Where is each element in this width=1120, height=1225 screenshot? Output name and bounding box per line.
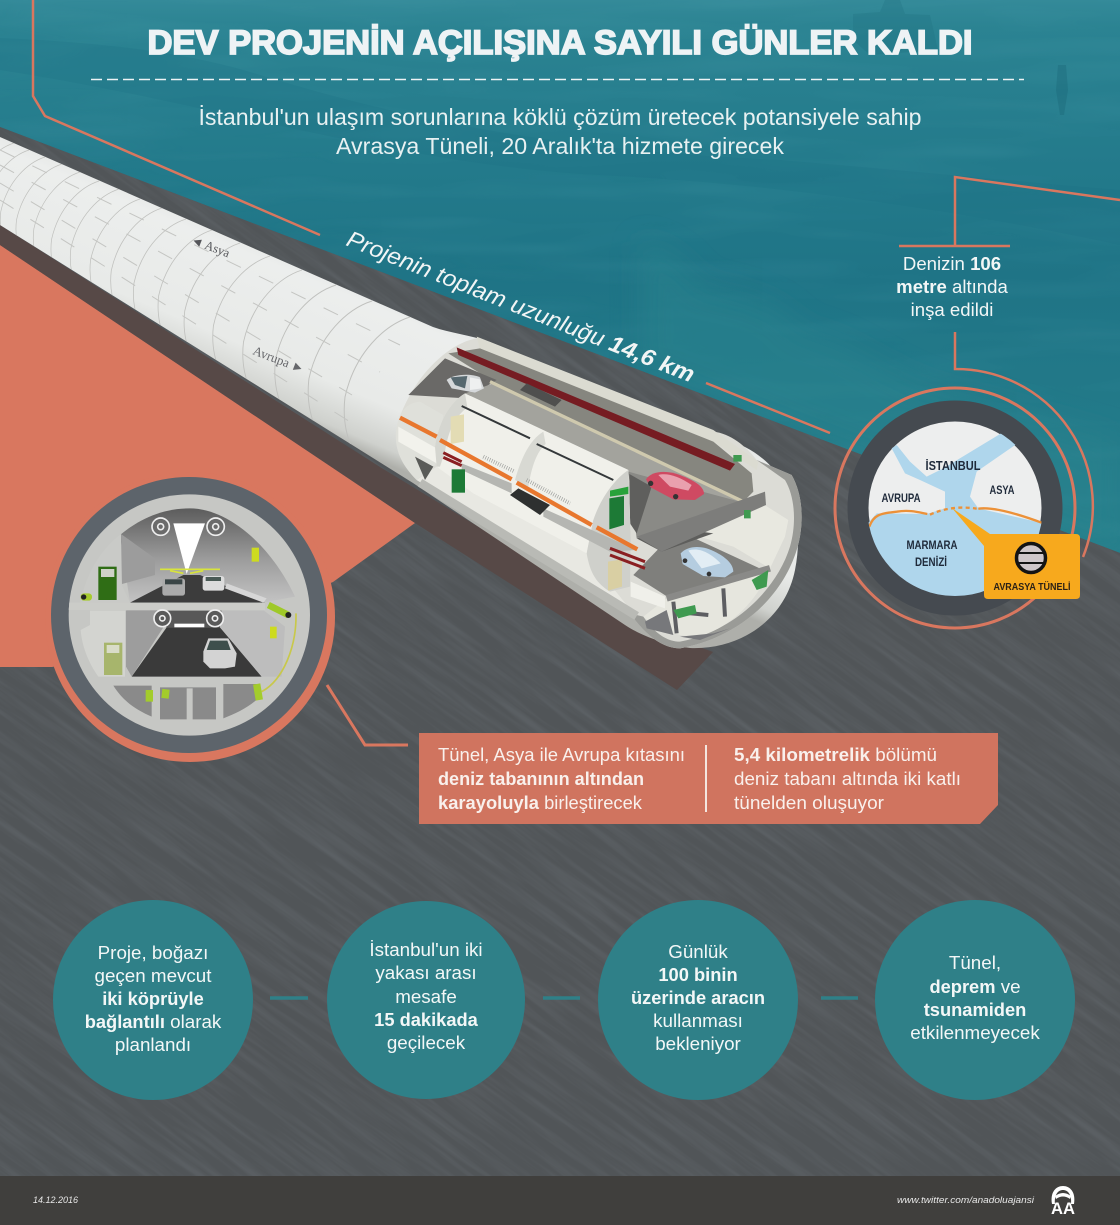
depth pointer line [899, 177, 1120, 557]
upper left compartment [120, 534, 121, 542]
lower right wall [677, 500, 788, 568]
subtitle [198, 104, 922, 159]
fans bottom [154, 610, 223, 627]
length line left [33, 0, 320, 235]
circle 3: üzerinde aracın [631, 987, 765, 1008]
title: DEV PROJENİN AÇILIŞINA SAYILI GÜNLER KALDI [148, 24, 972, 62]
circle 4: etkilenmeyecek [910, 1022, 1040, 1043]
length line right [706, 383, 830, 433]
circle 1: planlandı [115, 1034, 191, 1055]
concrete ledge [462, 463, 637, 552]
door top [98, 567, 117, 600]
lower road [633, 530, 763, 598]
pipe left [81, 593, 92, 601]
map labels: İSTANBUL [926, 458, 981, 473]
panel background [419, 733, 998, 824]
circle 3 [598, 900, 798, 1100]
map labels: ASYA [990, 485, 1014, 497]
lower road [132, 627, 262, 677]
map labels: AVRUPA [882, 493, 920, 505]
red rail [457, 347, 735, 471]
tunnel cross section [45, 472, 335, 762]
footer [0, 1176, 1120, 1225]
tunnel segment lines [0, 143, 410, 454]
depth text: Denizin 106 [903, 253, 1001, 274]
white block [398, 427, 437, 463]
end rim [630, 460, 802, 648]
map labels [882, 458, 1014, 569]
upper right wall [225, 583, 267, 603]
end disc [396, 338, 802, 648]
depth text: inşa edildi [911, 299, 993, 320]
circle 4: tsunamiden [924, 999, 1026, 1020]
lower right wall [220, 611, 285, 677]
basement [643, 568, 770, 637]
green cabinet left [452, 469, 465, 493]
lower left compartment [81, 611, 125, 677]
upper road [628, 472, 743, 538]
source url: www.twitter.com/anadoluajansi [897, 1195, 1035, 1206]
circle 2: geçilecek [387, 1032, 466, 1053]
white skylight [173, 523, 205, 574]
subtitle: İstanbul'un ulaşım sorunlarına köklü çözüm üretecek potansiyele sahip [198, 104, 922, 130]
label: Avrupa: Avrupa ► [251, 343, 307, 376]
panel: description [419, 733, 998, 824]
blue car [681, 547, 733, 577]
arch left [435, 393, 467, 467]
lower wall [417, 467, 633, 613]
panel: salmon background [0, 245, 415, 667]
bottom pipes [149, 684, 259, 702]
divider [705, 745, 707, 812]
map labels: MARMARA [906, 540, 958, 552]
text left: deniz tabanının altından [438, 768, 644, 789]
circle 2: İstanbul'un iki [369, 939, 483, 960]
orange band [400, 418, 637, 549]
cable [262, 613, 296, 692]
circle 1: iki köprüyle [102, 988, 204, 1009]
top car left [162, 578, 185, 596]
label: Asya: ◄ Asya [189, 233, 232, 260]
date: 14.12.2016 [33, 1195, 78, 1205]
red lower rails [443, 453, 645, 568]
circle 2: mesafe [395, 986, 457, 1007]
lower floor band [420, 483, 637, 616]
cable rails [462, 406, 613, 480]
map labels: DENİZİ [915, 556, 947, 569]
map water [868, 434, 1042, 596]
green cabinet right [609, 496, 624, 529]
depth text: metre altında [896, 276, 1008, 297]
text right [734, 744, 961, 813]
fans top [152, 518, 224, 535]
floor slab [68, 603, 265, 610]
silver car [447, 375, 484, 393]
soil strip under tunnel [0, 225, 713, 690]
dark notch [415, 457, 433, 480]
map outer ring [835, 388, 1075, 628]
section interior [68, 494, 310, 736]
title divider [91, 78, 1024, 80]
deck between partition and kerb [465, 383, 745, 537]
subtitle: Avrasya Tüneli, 20 Aralık'ta hizmete girecek [336, 133, 785, 159]
sea background [0, 0, 1120, 560]
left arch wall [396, 402, 443, 480]
lime box top right [252, 548, 259, 562]
connectors [270, 996, 858, 1000]
kerb [490, 382, 743, 502]
circle 4: Tünel, [949, 952, 1001, 973]
arch right [587, 470, 631, 592]
circle 2: yakası arası [375, 962, 477, 983]
green clamps [673, 455, 768, 618]
arch mid [515, 432, 546, 487]
circle 1: geçen mevcut [95, 965, 212, 986]
back ledge [477, 337, 758, 470]
text left: Tünel, Asya ile Avrupa kıtasını [438, 744, 685, 765]
circle 3: bekleniyor [655, 1033, 741, 1054]
bottom car [203, 638, 237, 668]
circle 2: 15 dakikada [374, 1009, 479, 1030]
red car [646, 472, 704, 500]
door [451, 414, 464, 444]
basement supports [673, 588, 725, 633]
section salmon ring [45, 472, 335, 762]
upper chamber [120, 508, 295, 603]
lower left wall [126, 611, 163, 677]
lower compartments [113, 684, 260, 719]
upper left wall [121, 534, 155, 584]
depth text [896, 253, 1008, 320]
text left [438, 744, 685, 813]
text right: 5,4 kilometrelik bölümü [734, 744, 937, 765]
circle 2 [327, 901, 525, 1099]
section pointer line [327, 685, 408, 745]
road shadow [629, 474, 652, 533]
upper deck floor [448, 348, 753, 502]
logo: AA: AA [1051, 1199, 1075, 1218]
length label: Projenin toplam uzunluğu 14,6 km [343, 225, 698, 387]
circle 1: Proje, boğazı [98, 942, 208, 963]
lower door [608, 559, 622, 591]
lime box bottom right [270, 627, 277, 638]
pipe right [268, 605, 291, 618]
slab underside [637, 528, 713, 552]
circle 4 [875, 900, 1075, 1100]
circle 3: kullanması [653, 1010, 743, 1031]
lower ceiling [126, 611, 222, 627]
section grey ring [51, 477, 327, 753]
tunnel body [0, 137, 798, 648]
circle 3: 100 binin [658, 964, 738, 985]
guard rail [483, 457, 570, 503]
icon: tunnel section [1016, 544, 1046, 572]
text right: deniz tabanı altında iki katlı [734, 768, 961, 789]
circle 3: Günlük [668, 941, 728, 962]
centre duct [187, 688, 193, 720]
text right: tünelden oluşuyor [734, 792, 884, 813]
door bottom [104, 643, 122, 675]
upper dark lane [408, 358, 497, 398]
vent duct [520, 383, 562, 407]
circle 1 [53, 900, 253, 1100]
top car right [203, 576, 224, 591]
callout: Avrasya Tüneli [952, 508, 1080, 599]
tunnel cutaway [396, 337, 802, 648]
map inset [835, 388, 1080, 628]
basement floor [645, 610, 730, 640]
map dark ring [858, 411, 1052, 605]
logo: AA [1051, 1186, 1075, 1218]
yellow lights [160, 569, 220, 573]
upper road [130, 575, 265, 603]
tunnel illustration [0, 137, 802, 648]
white bar [174, 624, 204, 627]
white block lower right [631, 582, 665, 608]
green sign [610, 487, 628, 497]
middle slab [637, 492, 766, 552]
text left: karayoluyla birleştirecek [438, 792, 643, 813]
dark recess [510, 488, 550, 515]
circle 4: deprem ve [929, 976, 1021, 997]
circle 1: bağlantılı olarak [85, 1011, 222, 1032]
basement slab [667, 568, 770, 598]
partition wall [435, 393, 631, 553]
callout: Avrasya Tüneli: AVRASYA TÜNELİ [994, 580, 1071, 593]
